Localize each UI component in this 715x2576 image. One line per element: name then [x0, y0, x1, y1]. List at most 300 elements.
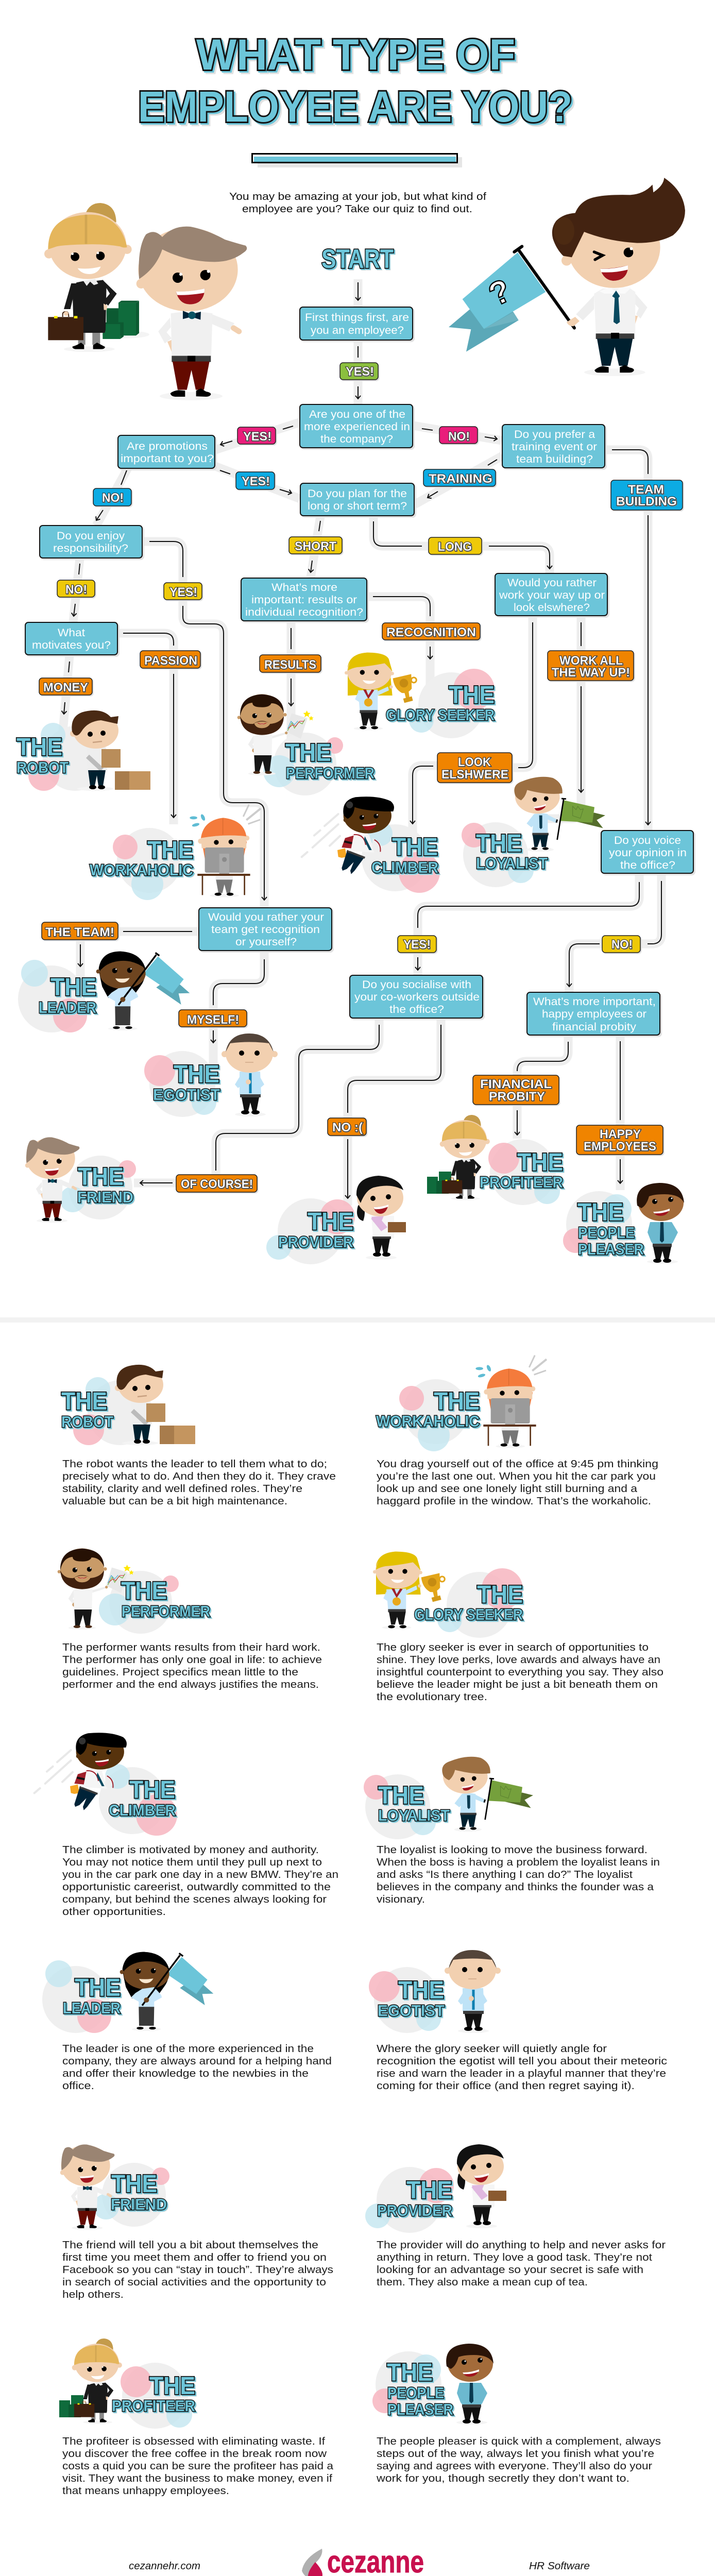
heading: the friend [77, 1163, 133, 1206]
label: yes blue [236, 472, 275, 489]
text: loyalist: When the boss is having a problem the loyalist leans in [377, 1857, 660, 1868]
text: workaholic [377, 1459, 658, 1507]
text: provider: The provider will do anything to help and never asks for [377, 2240, 666, 2251]
heading: the friend [111, 2171, 167, 2213]
label: work all the way up: THE WAY UP! [552, 666, 630, 680]
heading: the robot: THE [61, 1388, 107, 1415]
heading: the workaholic [90, 837, 193, 879]
text: robot: precisely what to do. And then they do it. They crave [62, 1471, 336, 1482]
text: profiteer [62, 2436, 334, 2497]
heading: the provider [377, 2177, 452, 2219]
text: egotist: Where the glory seeker will quietly angle for [377, 2043, 607, 2055]
heading: the provider: THE [406, 2177, 452, 2204]
panel: loyalist description [364, 1757, 660, 1905]
text: people pleaser: The people pleaser is quick with a complement, always [377, 2436, 661, 2447]
question: work up or look elsewhere: work your way up or [499, 589, 605, 601]
label: financial probity: FINANCIAL [480, 1077, 552, 1091]
title: EMPLOYEE ARE YOU? [138, 82, 572, 131]
icon: egotist figure [222, 1033, 278, 1116]
label: financial probity [473, 1075, 559, 1105]
label: look elshwere [437, 753, 512, 783]
label: no sad: NO :( [332, 1121, 363, 1134]
question: long or short term: Do you plan for the [308, 488, 407, 500]
question: happy employees or probity: What’s more important, [533, 996, 656, 1008]
icon: leader [120, 1952, 213, 2031]
text: loyalist: The loyalist is looking to move the business forward. [377, 1844, 648, 1856]
text: provider [377, 2240, 666, 2288]
heading: the loyalist: LOYALIST [476, 854, 548, 872]
heading: the provider: PROVIDER [278, 1233, 353, 1251]
label: no pink: NO! [448, 430, 470, 444]
icon: performer figure [237, 694, 314, 775]
panel: the workaholic outcome [90, 805, 261, 900]
text: workaholic: look up and see one lonely light still burning and a [377, 1483, 638, 1495]
text: provider: them. They also make a mean cup of tea. [377, 2277, 588, 2288]
panel: the profiteer outcome [427, 1115, 563, 1205]
heading: the robot: ROBOT [16, 758, 69, 776]
icon: profiteer figure [427, 1115, 490, 1200]
heading: the profiteer [112, 2372, 195, 2415]
heading: the loyalist: LOYALIST [378, 1806, 450, 1824]
text: friend [62, 2240, 333, 2300]
label: yes yellow [164, 583, 202, 600]
panel: provider description [365, 2144, 666, 2288]
footer: cezanne logo [302, 2545, 424, 2576]
label: no sad [328, 1118, 366, 1136]
panel: the people pleaser outcome [563, 1183, 684, 1264]
label: recognition: RECOGNITION [386, 625, 476, 639]
heading: the egotist: THE [174, 1061, 219, 1088]
question: voice your opinion: your opinion in [609, 847, 687, 859]
label: yes pink: YES! [243, 430, 271, 444]
question: socialise: the office? [389, 1004, 444, 1015]
heading: the people pleaser: PLEASER [387, 2400, 453, 2418]
heading: the friend: FRIEND [77, 1188, 133, 1206]
text: profiteer: costs a quid you can be sure the profiteer has paid a [62, 2461, 334, 2472]
icon: provider figure [356, 1176, 406, 1260]
heading: the robot [16, 734, 69, 776]
heading: the people pleaser [577, 1199, 644, 1258]
panel: performer description [58, 1548, 322, 1690]
icon: leader figure [96, 952, 190, 1030]
panel: the climber outcome [302, 796, 440, 893]
question: training or team building [502, 425, 605, 468]
heading: the friend: THE [78, 1163, 124, 1191]
label: happy employees: HAPPY [600, 1127, 641, 1141]
start heading: START [321, 244, 394, 274]
panel: profiteer description [59, 2338, 334, 2497]
text: glory seeker: insightful counterpoint to everything you say. They also [377, 1667, 663, 1678]
question: first things first: you an employee? [311, 325, 404, 336]
heading: the performer: THE [285, 739, 331, 767]
question: work up or look elsewhere: Would you rather [507, 577, 597, 589]
label: myself [179, 1010, 247, 1027]
text: climber: You may not notice them until they pull up next to [62, 1857, 322, 1868]
question: results or recognition: individual recognition? [245, 606, 363, 618]
heading: the climber: THE [392, 834, 438, 861]
question: experienced: more experienced in [304, 421, 410, 433]
question: what motivates you: motivates you? [32, 639, 111, 651]
text: provider: anything in return. They love a good task. They’re not [377, 2252, 652, 2263]
label: happy employees [576, 1125, 663, 1155]
text: loyalist: believes in the company and thinks the founder was a [377, 1882, 654, 1893]
label: yes blue: YES! [242, 474, 270, 488]
text: friend: The friend will tell you a bit about themselves the [62, 2240, 318, 2251]
question: results or recognition: What’s more [271, 582, 337, 594]
heading: the workaholic: WORKAHOLIC [376, 1412, 480, 1430]
text: performer [62, 1642, 322, 1690]
label: short [289, 537, 342, 554]
heading: the people pleaser: PEOPLE [387, 2384, 444, 2402]
label: yes green [340, 363, 378, 380]
label: financial probity: PROBITY [489, 1090, 545, 1104]
label: myself: MYSELF! [187, 1013, 239, 1027]
heading: the leader: LEADER [39, 998, 96, 1016]
heading: the climber [371, 834, 438, 876]
label: results: RESULTS [264, 658, 316, 672]
hero: man in bow tie [137, 227, 247, 400]
label: short: SHORT [295, 539, 336, 553]
heading: the provider [278, 1208, 353, 1251]
heading: the robot: ROBOT [61, 1413, 113, 1431]
label: no yellow: NO! [65, 583, 87, 597]
icon: robot [115, 1365, 195, 1445]
heading: the glory seeker: GLORY SEEKER [414, 1605, 523, 1623]
question: happy employees or probity: happy employees or [542, 1008, 646, 1020]
icon: friend figure [25, 1137, 79, 1223]
question: training or team building: Do you prefer a [514, 429, 595, 440]
heading: the glory seeker [414, 1581, 523, 1623]
text: climber [62, 1844, 338, 1918]
heading: the friend: FRIEND [111, 2195, 167, 2213]
heading: the people pleaser: PEOPLE [578, 1224, 635, 1242]
panel: the robot outcome [16, 710, 150, 791]
label: happy employees: EMPLOYEES [584, 1140, 656, 1154]
text: provider: looking for an advantage so your secret is safe with [377, 2264, 643, 2276]
text: profiteer: you discover the free coffee in the break room now [62, 2448, 327, 2460]
question: socialise [350, 975, 483, 1018]
panel: the provider outcome [266, 1176, 406, 1264]
label: long: LONG [438, 540, 472, 554]
heading: the performer: PERFORMER [286, 764, 374, 782]
text: glory seeker [377, 1642, 663, 1703]
question: experienced: the company? [320, 433, 393, 445]
text: people pleaser: saying and agrees with everyone. They’ll also do your [377, 2461, 652, 2472]
heading: the workaholic: THE [147, 837, 193, 864]
text: workaholic: haggard profile in the window. That’s the workaholic. [377, 1496, 651, 1507]
question: long or short term [300, 483, 414, 516]
icon: egotist [445, 1950, 501, 2033]
question: what motivates you [25, 622, 117, 655]
heading: the workaholic: THE [434, 1388, 480, 1415]
icon: profiteer [59, 2338, 122, 2424]
text: workaholic: you’re the last one out. When you hit the car park you [377, 1471, 656, 1482]
text: glory seeker: believe the leader might be just a bit beneath them on [377, 1679, 658, 1690]
label: yes yellow second: YES! [403, 938, 431, 952]
text: leader: company, they are always around for a helping hand [62, 2056, 332, 2067]
text: egotist: rise and warn the leader in a playful manner that they’re [377, 2068, 666, 2079]
heading: the provider: PROVIDER [377, 2201, 452, 2219]
text: glory seeker: The glory seeker is ever in search of opportunities to [377, 1642, 649, 1653]
question: team or yourself [199, 908, 332, 951]
heading: the climber: CLIMBER [371, 858, 438, 876]
panel: people pleaser description [372, 2344, 661, 2484]
text: climber: The climber is motivated by money and authority. [62, 1844, 319, 1856]
text: workaholic: You drag yourself out of the office at 9:45 pm thinking [377, 1459, 658, 1470]
heading: the workaholic: WORKAHOLIC [90, 861, 193, 879]
text: leader [62, 2043, 332, 2092]
text: robot: stability, clarity and well defined roles. They’re [62, 1483, 302, 1495]
text: friend: first time you meet them and offer to friend you on [62, 2252, 327, 2263]
icon: provider [457, 2144, 506, 2228]
question: responsibility: responsibility? [53, 543, 128, 554]
icon: workaholic [475, 1355, 547, 1448]
label: no yellow [57, 580, 95, 597]
label: yes pink [237, 427, 276, 444]
label: no yellow second [602, 936, 640, 953]
heading: the climber [109, 1776, 176, 1819]
label: training [423, 469, 496, 486]
text: performer: guidelines. Project specifics mean little to the [62, 1667, 298, 1678]
label: yes green: YES! [346, 365, 374, 379]
connector bands [63, 279, 661, 1206]
panel: workaholic description [376, 1355, 658, 1507]
question: voice your opinion: Do you voice [614, 835, 681, 846]
heading: the egotist: THE [398, 1977, 444, 2004]
question: responsibility: Do you enjoy [57, 530, 125, 542]
heading: the egotist [153, 1061, 220, 1104]
question: first things first [300, 307, 413, 340]
heading: the climber: THE [129, 1776, 175, 1804]
icon: loyalist figure [514, 777, 605, 852]
label: work all the way up [548, 651, 634, 681]
label: team building [611, 480, 683, 510]
question: happy employees or probity [527, 992, 660, 1035]
heading: the glory seeker: GLORY SEEKER [386, 706, 495, 724]
panel: climber description [35, 1733, 338, 1918]
text: climber: other opportunities. [62, 1906, 166, 1918]
text: robot: The robot wants the leader to tell them what to do; [62, 1459, 327, 1470]
title: WHAT TYPE OF [196, 30, 515, 79]
text: loyalist [377, 1844, 660, 1905]
heading: the loyalist: THE [378, 1782, 424, 1809]
heading: the people pleaser [387, 2359, 453, 2418]
text: loyalist: and asks “Is there anything I can do?” The loyalist [377, 1869, 633, 1880]
question: training or team building: training event or [512, 441, 597, 453]
text: loyalist: visionary. [377, 1894, 425, 1905]
label: of course: OF COURSE! [181, 1177, 253, 1191]
question: happy employees or probity: financial probity [552, 1021, 637, 1033]
label: team building: TEAM [628, 483, 664, 497]
text: robot: valuable but can be a bit high maintenance. [62, 1496, 287, 1507]
label: money [39, 678, 92, 695]
text: leader: The leader is one of the more experienced in the [62, 2043, 314, 2055]
heading: the people pleaser: THE [387, 2359, 433, 2386]
question: team or yourself: team get recognition [211, 924, 320, 936]
label: training: TRAINING [429, 472, 492, 486]
heading: the egotist: EGOTIST [378, 2002, 445, 2020]
label: look elshwere: ELSHWERE [441, 768, 508, 782]
icon: workaholic figure [190, 805, 261, 897]
hero: woman with suitcase and money [44, 203, 149, 352]
text: egotist: coming for their office (and then regret saying it). [377, 2080, 635, 2092]
label: no yellow second: NO! [611, 938, 633, 952]
icon: robot figure [70, 710, 150, 791]
text: friend: help others. [62, 2289, 124, 2300]
heading: the robot [61, 1388, 113, 1431]
text: people pleaser: steps out of the way, always let you finish what you’re [377, 2448, 654, 2460]
question: training or team building: team building? [516, 453, 593, 465]
question: work up or look elsewhere [495, 573, 607, 616]
heading: the performer [121, 1578, 210, 1620]
text: performer: The performer has only one goal in life: to achieve [62, 1654, 322, 1666]
heading: the provider: THE [308, 1208, 353, 1235]
heading: the profiteer: THE [517, 1149, 563, 1176]
question: long or short term: long or short term? [308, 500, 407, 512]
text: robot [62, 1459, 336, 1507]
hero: man with question-mark flag: ? [483, 272, 517, 313]
text: climber: opportunistic careerist, outwardly committed to the [62, 1882, 331, 1893]
icon: people pleaser figure [637, 1183, 684, 1264]
panel: egotist description [369, 1950, 667, 2092]
label: no pink [439, 427, 478, 444]
hero: man with question-mark flag [449, 178, 685, 376]
title [138, 30, 572, 131]
text: egotist [377, 2043, 667, 2092]
heading: the leader [63, 1974, 121, 2017]
question: socialise: Do you socialise with [362, 979, 471, 991]
question: promotions: Are promotions [127, 440, 208, 452]
question: results or recognition: important: results or [251, 594, 357, 606]
question: first things first: First things first, are [305, 312, 409, 324]
heading: the leader: THE [50, 974, 96, 1001]
intro text: You may be amazing at your job, but what kind of [229, 191, 486, 202]
label: yes yellow: YES! [169, 585, 197, 599]
label: no blue: NO! [102, 491, 124, 505]
heading: the performer: PERFORMER [122, 1602, 210, 1620]
panel: the friend outcome [25, 1137, 136, 1223]
text: glory seeker: shine. They love perks, love awards and always have an [377, 1654, 660, 1666]
panel: the leader outcome [18, 952, 190, 1032]
heading: the glory seeker: THE [477, 1581, 523, 1608]
text: leader: office. [62, 2080, 94, 2092]
intro text: employee are you? Take our quiz to find out. [242, 204, 472, 215]
text: climber: company, but behind the scenes always looking for [62, 1894, 327, 1905]
question: responsibility [40, 526, 142, 558]
label: passion: PASSION [144, 654, 197, 668]
icon: glory seeker figure [345, 653, 416, 730]
heading: the loyalist [476, 830, 548, 872]
heading: the performer: THE [121, 1578, 167, 1605]
label: look elshwere: LOOK [458, 755, 491, 769]
heading: the glory seeker [386, 682, 495, 724]
heading: the leader: LEADER [63, 1999, 121, 2017]
heading: the profiteer: PROFITEER [480, 1173, 563, 1191]
panel: the egotist outcome [144, 1033, 278, 1117]
text: egotist: recognition the egotist will tell you about their meteoric [377, 2056, 667, 2067]
heading: the friend: THE [111, 2171, 157, 2198]
label: work all the way up: WORK ALL [559, 654, 623, 668]
heading: the profiteer: PROFITEER [112, 2397, 195, 2415]
connector lines and arrows [64, 282, 661, 1198]
question: socialise: your co-workers outside [354, 991, 480, 1003]
text: people pleaser: work for you, though secretly they don’t want to. [376, 2473, 629, 2484]
label: long [429, 537, 482, 554]
footer: website: cezannehr.com [129, 2561, 200, 2572]
text: performer: The performer wants results from their hard work. [62, 1642, 320, 1653]
text: people pleaser [376, 2436, 661, 2484]
heading: the performer [285, 739, 374, 782]
title underline rule [252, 154, 462, 167]
question: promotions [118, 435, 215, 468]
question: team or yourself: or yourself? [235, 936, 297, 948]
question: voice your opinion [601, 831, 693, 873]
question: experienced [300, 404, 413, 448]
heading: the climber: CLIMBER [109, 1801, 176, 1819]
question: voice your opinion: the office? [620, 859, 675, 871]
panel: the loyalist outcome [462, 777, 605, 887]
intro text [229, 191, 486, 215]
text: climber: you in the car park one day in a new BMW. They’re an [62, 1869, 338, 1880]
panel: the performer outcome [237, 694, 374, 795]
panel: the glory seeker outcome [345, 653, 495, 738]
label: no blue [93, 488, 131, 506]
heading: the leader [39, 974, 96, 1016]
icon: performer [58, 1548, 134, 1630]
question: what motivates you: What [58, 627, 85, 639]
question: results or recognition [241, 578, 367, 621]
question: promotions: important to you? [121, 453, 214, 465]
text: profiteer: that means unhappy employees. [62, 2485, 229, 2497]
heading: the people pleaser: PLEASER [578, 1240, 644, 1258]
text: profiteer: The profiteer is obsessed with eliminating waste. If [62, 2436, 326, 2447]
icon: climber figure [302, 796, 394, 874]
question: work up or look elsewhere: look elswhere? [514, 602, 590, 614]
question: team or yourself: Would you rather your [208, 911, 324, 923]
label: the team: THE TEAM! [45, 925, 114, 939]
panel: leader description [42, 1952, 332, 2092]
icon: people pleaser [446, 2344, 493, 2425]
heading: the loyalist: THE [476, 830, 522, 857]
question: experienced: Are you one of the [309, 409, 405, 420]
panel: friend description [60, 2144, 333, 2300]
heading: the loyalist [378, 1782, 450, 1824]
heading: the egotist: EGOTIST [153, 1086, 220, 1104]
heading: the egotist [378, 1977, 445, 2020]
text: friend: in search of social activities and the opportunity to [62, 2277, 326, 2288]
text: performer: performer and the end always justifies the means. [62, 1679, 319, 1690]
heading: the leader: THE [75, 1974, 121, 2002]
text: glory seeker: the evolutionary tree. [377, 1691, 487, 1703]
panel: robot description [61, 1365, 336, 1507]
text: friend: Facebook so you can “stay in touch”. They’re always [62, 2264, 333, 2276]
icon: friend [60, 2144, 114, 2230]
label: team building: BUILDING [616, 495, 677, 509]
text: profiteer: visit. They want the business to make money, even if [62, 2473, 332, 2484]
panel: glory seeker description [373, 1552, 663, 1703]
icon: glory seeker [373, 1552, 445, 1629]
footer: tagline: HR Software [529, 2561, 590, 2572]
heading: the glory seeker: THE [449, 682, 495, 709]
label: yes yellow second [398, 936, 436, 953]
heading: the profiteer [480, 1149, 563, 1191]
label: money: MONEY [43, 681, 88, 694]
heading: the profiteer: THE [149, 2372, 195, 2400]
text: leader: and offer their knowledge to the newbies in the [62, 2068, 309, 2079]
heading: the workaholic [376, 1388, 480, 1430]
heading: the people pleaser: THE [577, 1199, 623, 1226]
icon: loyalist [442, 1757, 533, 1832]
